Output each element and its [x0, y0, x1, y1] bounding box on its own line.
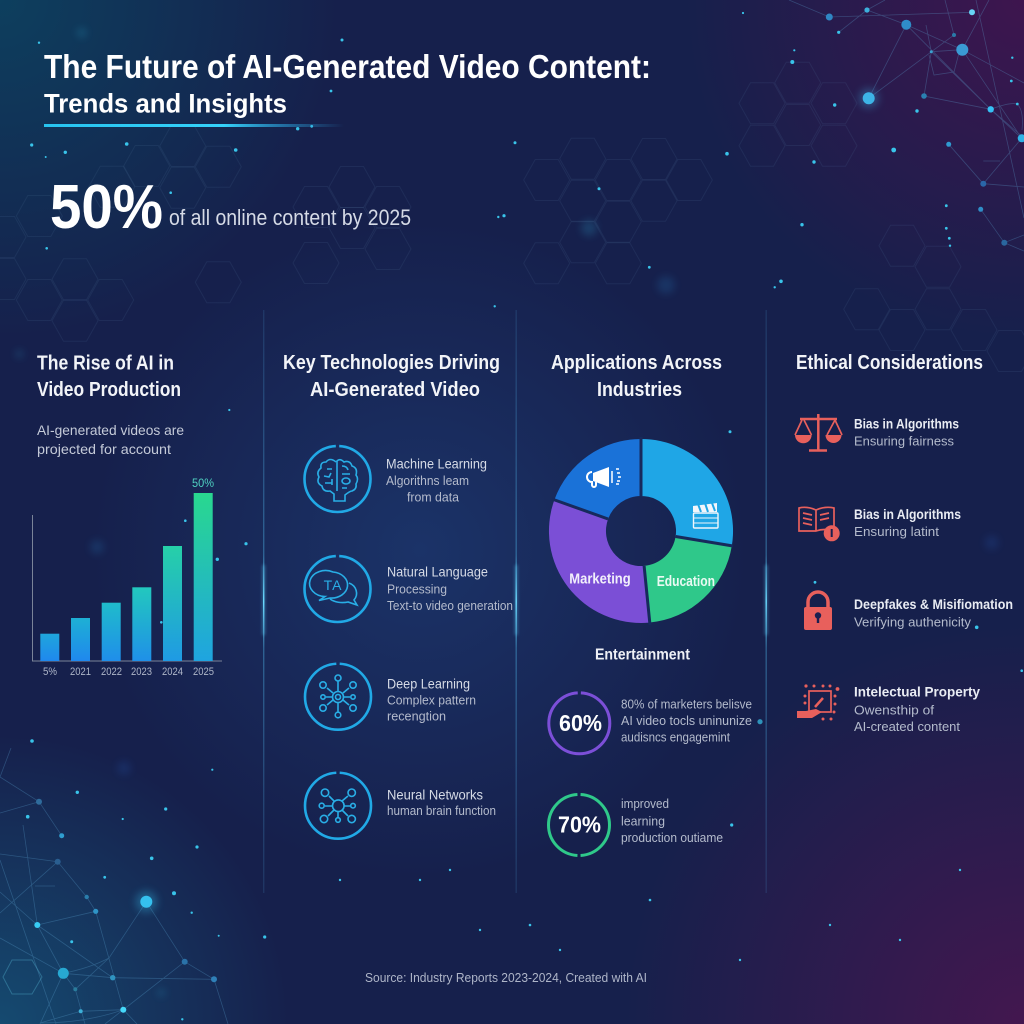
text: neural networks: human brain function: [387, 803, 496, 818]
bar chart: 2025: [193, 666, 214, 678]
stat: 70%: production outiame: [621, 830, 723, 845]
icon: intellectual property: [797, 684, 839, 720]
title: The Future of AI-Generated Video Content:: [44, 48, 651, 85]
heading: key technologies: AI-Generated Video: [310, 379, 480, 401]
text block: projection: projected for account: [37, 441, 171, 457]
stat: 60%: 60%: [559, 710, 602, 736]
donut chart: [549, 437, 733, 663]
stat: 60%: audisncs engagemint: [621, 730, 730, 745]
stat: 60%: 80% of marketers belisve: [621, 696, 752, 711]
network: bottom left: [0, 748, 228, 1024]
text: deep learning: recengtion: [387, 709, 446, 724]
stat: 60%: AI video tocls uninunize: [621, 713, 752, 728]
text: machine learning: Machine Learning: [386, 455, 487, 471]
bar chart: 2021: [70, 666, 91, 678]
heading: applications: [551, 352, 722, 401]
title underline: [44, 124, 344, 127]
heading: rise of AI: [37, 352, 181, 401]
bar chart: 2022: [101, 666, 122, 678]
icon: neural network: [305, 773, 371, 839]
panel: key technologies: [283, 352, 513, 839]
bar chart: 50%: [192, 476, 214, 490]
panel: ethical considerations: [795, 352, 1013, 734]
heading: rise of AI: Video Production: [37, 379, 181, 401]
text: bias in algorithms: Ensuring fairness: [854, 434, 954, 449]
icon: speech bubbles: [304, 556, 370, 622]
text: second bias in algorithms: [854, 506, 961, 539]
donut chart: Entertainment: [595, 646, 691, 663]
text: intellectual property: [854, 684, 980, 734]
heading: key technologies: [283, 352, 500, 401]
text: machine learning: [386, 455, 487, 505]
title: Trends and Insights: [44, 89, 287, 119]
icon: brain: [304, 446, 370, 512]
column dividers: [263, 310, 767, 893]
text: natural language processing: Processing: [387, 581, 447, 596]
stat: 70%: learning: [621, 814, 665, 829]
text: intellectual property: Owensthip of: [854, 702, 934, 717]
stat: 70%: [548, 794, 723, 856]
text: bias in algorithms: Bias in Algorithms: [854, 415, 959, 431]
heading: key technologies: Key Technologies Driving: [283, 352, 500, 374]
title: [44, 48, 651, 119]
text: natural language processing: [387, 564, 513, 613]
text: machine learning: from data: [407, 490, 460, 505]
text: natural language processing: Text-to video generation: [387, 598, 513, 613]
headline statistic: 50%: [50, 173, 163, 242]
text: natural language processing: Natural Language: [387, 564, 488, 580]
icon: deep learning: [305, 664, 371, 730]
panel: applications: [548, 352, 752, 856]
text: deepfakes: Verifying authenicity: [854, 615, 972, 630]
headline statistic: of all online content by 2025: [169, 205, 411, 230]
text: second bias in algorithms: Bias in Algorithms: [854, 506, 961, 522]
source note: Source: Industry Reports 2023-2024, Created with AI: [365, 970, 647, 985]
text: machine learning: Algorithns leam: [386, 473, 469, 488]
text: bias in algorithms: [854, 415, 959, 449]
icon: scales: [795, 414, 842, 450]
heading: applications: Industries: [597, 379, 682, 401]
text: deep learning: Deep Learning: [387, 675, 470, 691]
panel: the rise of AI: [32, 352, 222, 678]
text block: projection: AI-generated videos are: [37, 422, 184, 438]
icon: clapperboard: [693, 503, 718, 528]
bar chart: 2024: [162, 666, 183, 678]
hexagon pattern: [0, 62, 1024, 371]
stat: 60%: [549, 693, 752, 754]
stat: 70%: improved: [621, 796, 669, 811]
icon: padlock: [804, 592, 832, 630]
donut chart: Education: [657, 573, 715, 590]
text block: projection: [37, 422, 184, 457]
text: intellectual property: Intelectual Property: [854, 684, 980, 700]
bar chart: 5%: [43, 666, 57, 678]
donut chart: Marketing: [569, 570, 631, 587]
network: top right: [789, 0, 1024, 251]
text: neural networks: Neural Networks: [387, 786, 483, 802]
heading: ethical considerations: Ethical Considerations: [796, 352, 983, 374]
icon: book with alert: [799, 507, 840, 541]
stat: 70%: 70%: [558, 812, 601, 838]
text: deepfakes: [854, 596, 1013, 630]
text: neural networks: [387, 786, 496, 818]
heading: rise of AI: The Rise of AI in: [37, 352, 174, 374]
icon: speech bubbles: TA: [324, 577, 342, 593]
headline statistic: [50, 173, 411, 242]
bar chart: 2023: [131, 666, 152, 678]
text: second bias in algorithms: Ensuring latint: [854, 524, 939, 539]
icon: megaphone: [587, 467, 621, 487]
heading: applications: Applications Across: [551, 352, 722, 374]
text: intellectual property: AI-created content: [854, 719, 960, 734]
bar chart: [32, 476, 222, 678]
text: deep learning: Complex pattern: [387, 692, 476, 707]
text: deep learning: [387, 675, 476, 724]
